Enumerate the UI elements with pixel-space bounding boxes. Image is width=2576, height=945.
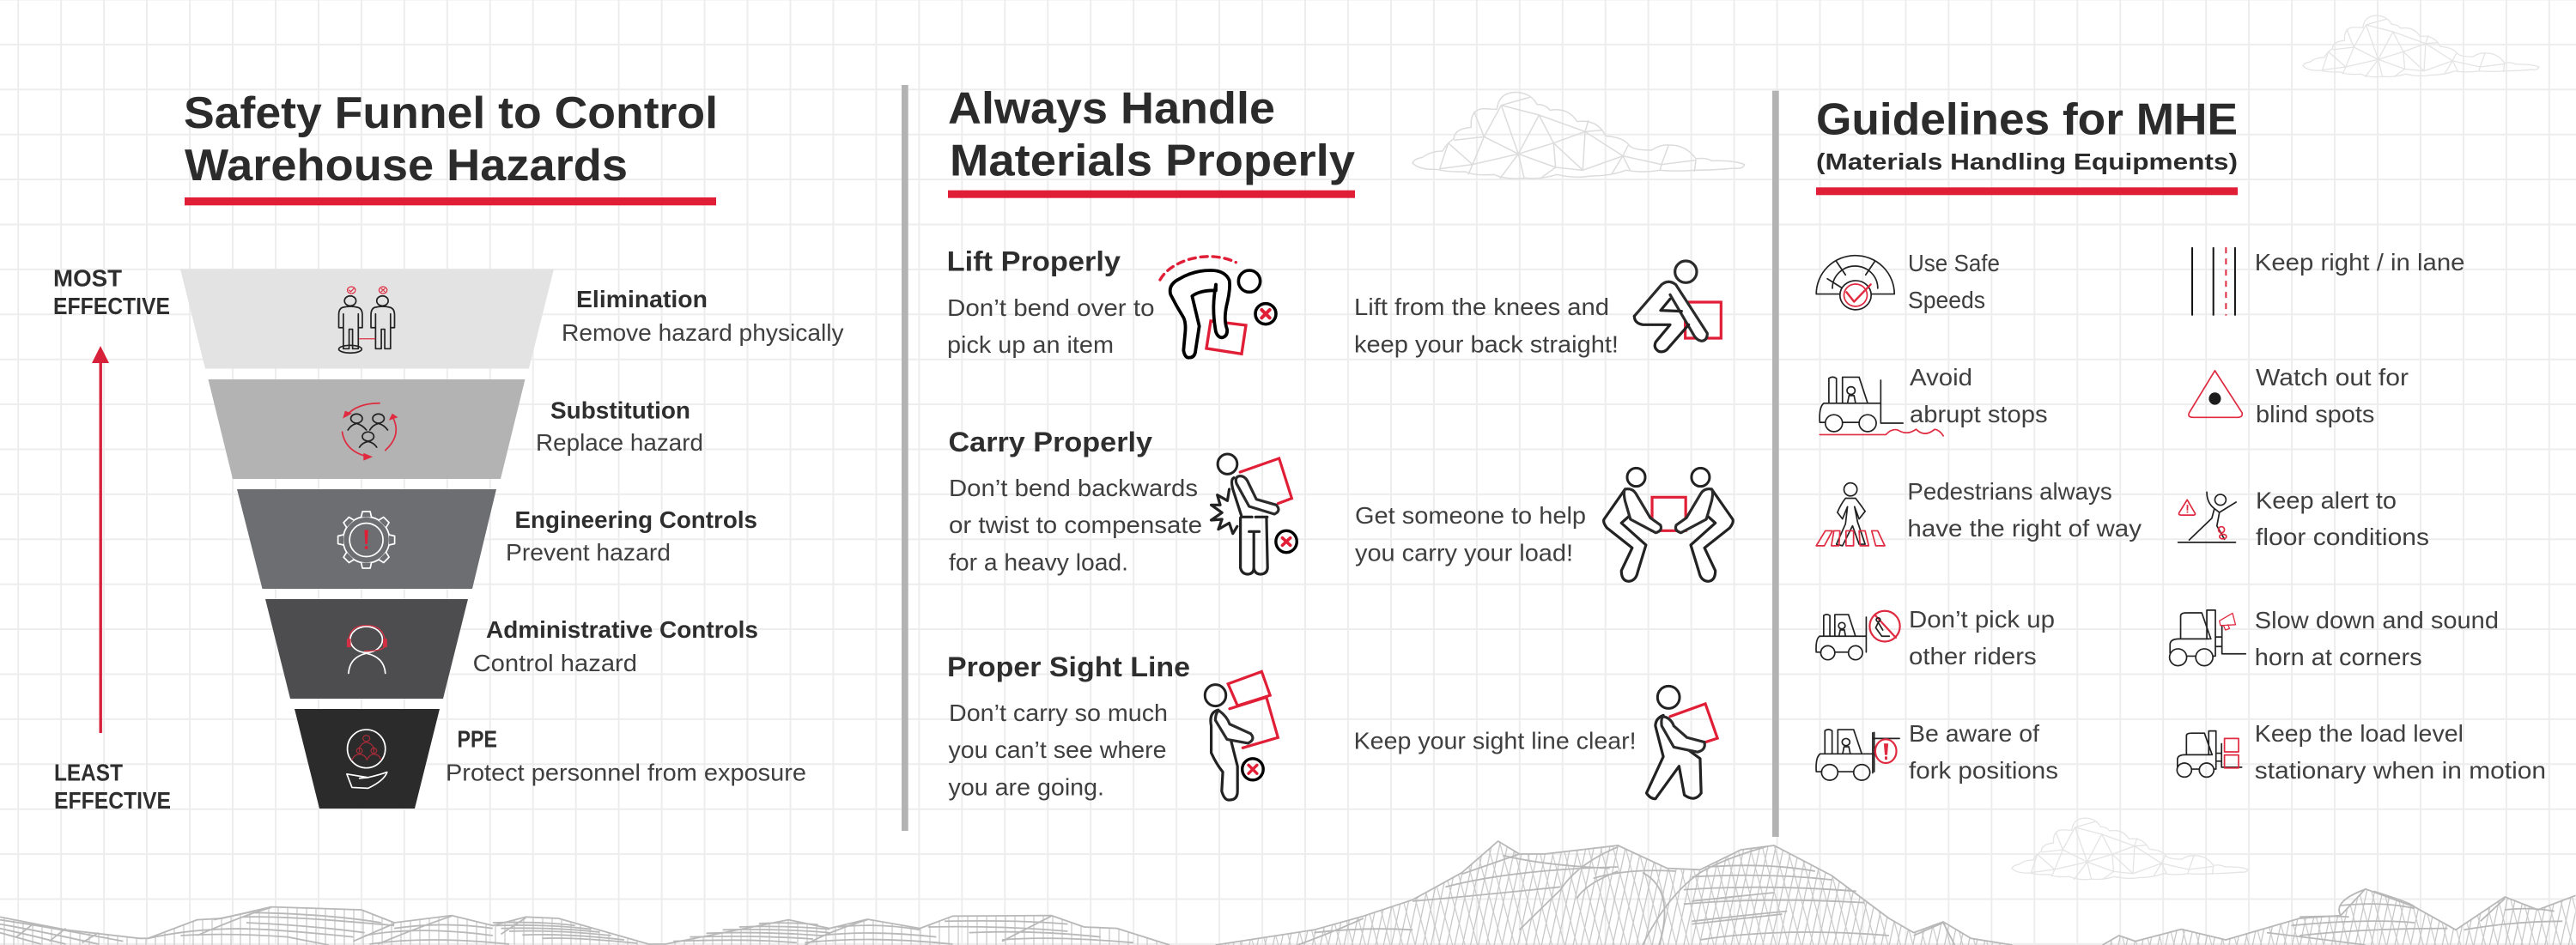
guideline: pedestrians: Pedestrians always <box>1907 478 2112 505</box>
text: sight line warning: you are going. <box>948 774 1104 801</box>
heading: handle materials: Always Handle <box>948 83 1275 133</box>
text: lift improperly: Lift Properly <box>947 245 1121 276</box>
heading: handle materials <box>948 83 1355 198</box>
icon: two person carry <box>1604 468 1733 581</box>
guideline: blind spots <box>2189 364 2409 427</box>
tier text: administrative controls <box>473 616 758 676</box>
guideline: abrupt stops: abrupt stops <box>1910 401 2048 427</box>
tier text: substitution <box>536 397 703 456</box>
cloud: top right <box>2303 15 2539 77</box>
guideline: sound horn: Slow down and sound <box>2255 607 2499 633</box>
tier text: PPE <box>446 726 806 786</box>
text: lift improperly: pick up an item <box>947 331 1114 358</box>
text: sight line warning: Proper Sight Line <box>947 651 1190 682</box>
heading: handle materials: Materials Properly <box>950 136 1355 185</box>
panel: MHE guidelines <box>1816 95 2546 784</box>
guideline: abrupt stops: Avoid <box>1910 364 1972 391</box>
guideline: load level <box>2177 720 2546 784</box>
text: carry improperly: Don’t bend backwards <box>949 475 1198 501</box>
text: sight line warning: Don’t carry so much <box>949 700 1168 726</box>
guideline: fork positions: Be aware of <box>1909 720 2039 747</box>
heading: funnel: Safety Funnel to Control <box>184 88 718 138</box>
guideline: no riders: Don’t pick up <box>1909 606 2055 633</box>
icon: two people distancing <box>339 287 394 353</box>
divider: left <box>902 85 908 831</box>
label: least effective: EFFECTIVE <box>54 787 171 814</box>
panel: safety funnel <box>53 88 844 814</box>
cloud: lower right <box>2012 818 2248 880</box>
guideline: fork positions <box>1816 720 2058 784</box>
text: sight line warning <box>947 651 1190 801</box>
text: lift improperly <box>947 245 1154 358</box>
text: carry improperly: or twist to compensate <box>949 512 1202 538</box>
icon: hand protecting people <box>347 730 387 788</box>
icon: lift from knees <box>1634 261 1721 352</box>
guideline: pedestrians: have the right of way <box>1907 515 2142 542</box>
text: carry tip: Get someone to help <box>1355 502 1586 529</box>
label: least effective: LEAST <box>54 759 123 786</box>
guideline: keep right <box>2192 247 2464 316</box>
divider: right <box>1772 91 1779 837</box>
guideline: safe speeds: Speeds <box>1908 287 1985 313</box>
icon: gear with warning <box>338 512 395 568</box>
tier text: administrative controls: Administrative Controls <box>486 616 758 643</box>
icon: clear sight carry <box>1646 686 1717 799</box>
text: lift properly tip: keep your back straight! <box>1354 331 1619 358</box>
icon: people rotating <box>343 403 398 461</box>
funnel tier: substitution <box>208 379 526 479</box>
text: carry improperly <box>948 427 1202 576</box>
guideline: load level: stationary when in motion <box>2255 757 2546 784</box>
tier text: engineering controls <box>506 506 757 566</box>
wireframe mountains <box>0 815 2576 945</box>
guideline: no riders <box>1816 606 2055 669</box>
cloud: centre <box>1413 92 1745 179</box>
text: carry tip <box>1355 502 1586 566</box>
guideline: blind spots: blind spots <box>2256 401 2374 427</box>
tier text: administrative controls: Control hazard <box>473 650 637 676</box>
heading: funnel: Warehouse Hazards <box>185 141 628 191</box>
text: carry tip: you carry your load! <box>1355 539 1573 566</box>
panel: handle materials <box>947 83 1733 801</box>
text: lift properly tip: Lift from the knees and <box>1354 294 1609 320</box>
tier text: elimination <box>562 286 844 346</box>
guideline: floor conditions: Keep alert to <box>2256 488 2397 514</box>
funnel tier: PPE <box>295 709 440 809</box>
guideline: safe speeds <box>1816 250 2000 313</box>
heading: MHE guidelines: (Materials Handling Equipments) <box>1816 148 2238 174</box>
tier text: PPE: Protect personnel from exposure <box>446 759 806 786</box>
guideline: floor conditions: floor conditions <box>2256 524 2429 550</box>
tier text: engineering controls: Prevent hazard <box>506 539 671 566</box>
label: least effective <box>54 759 171 814</box>
icon: back strain carry <box>1212 454 1297 574</box>
guideline: load level: Keep the load level <box>2255 720 2464 747</box>
label: most effective <box>53 265 170 319</box>
heading: MHE guidelines: Guidelines for MHE <box>1816 95 2238 145</box>
label: most effective: EFFECTIVE <box>53 293 170 319</box>
icon: person with headset <box>347 626 387 673</box>
text: carry improperly: Carry Properly <box>948 427 1152 457</box>
text: sight line tip: Keep your sight line clear! <box>1354 728 1637 754</box>
text: carry improperly: for a heavy load. <box>949 549 1128 576</box>
heading: funnel <box>184 88 718 205</box>
tier text: PPE: PPE <box>457 726 497 753</box>
guideline: floor conditions <box>2178 488 2429 550</box>
heading: MHE guidelines <box>1816 95 2238 195</box>
funnel tier: elimination <box>180 270 554 369</box>
text: sight line warning: you can’t see where <box>948 736 1166 763</box>
funnel tier: engineering controls <box>237 489 496 589</box>
guideline: keep right: Keep right / in lane <box>2255 249 2464 276</box>
label: most effective: MOST <box>53 265 122 292</box>
text: lift properly tip <box>1354 294 1619 358</box>
tier text: elimination: Elimination <box>576 286 708 312</box>
tier text: elimination: Remove hazard physically <box>562 319 844 346</box>
icon: bent back lift <box>1160 257 1276 358</box>
icon: overloaded carry <box>1205 671 1278 800</box>
guideline: abrupt stops <box>1820 364 2048 436</box>
guideline: sound horn: horn at corners <box>2255 644 2422 670</box>
text: lift improperly: Don’t bend over to <box>947 294 1154 321</box>
guideline: sound horn <box>2170 607 2499 670</box>
funnel tier: administrative controls <box>265 599 468 699</box>
guideline: safe speeds: Use Safe <box>1908 250 2000 276</box>
guideline: pedestrians <box>1816 478 2142 546</box>
guideline: fork positions: fork positions <box>1909 757 2058 784</box>
arrow: effectiveness <box>92 346 109 733</box>
tier text: substitution: Substitution <box>550 397 690 424</box>
tier text: engineering controls: Engineering Controls <box>515 506 757 533</box>
guideline: blind spots: Watch out for <box>2256 364 2409 391</box>
tier text: substitution: Replace hazard <box>536 429 703 456</box>
guideline: no riders: other riders <box>1909 643 2037 669</box>
